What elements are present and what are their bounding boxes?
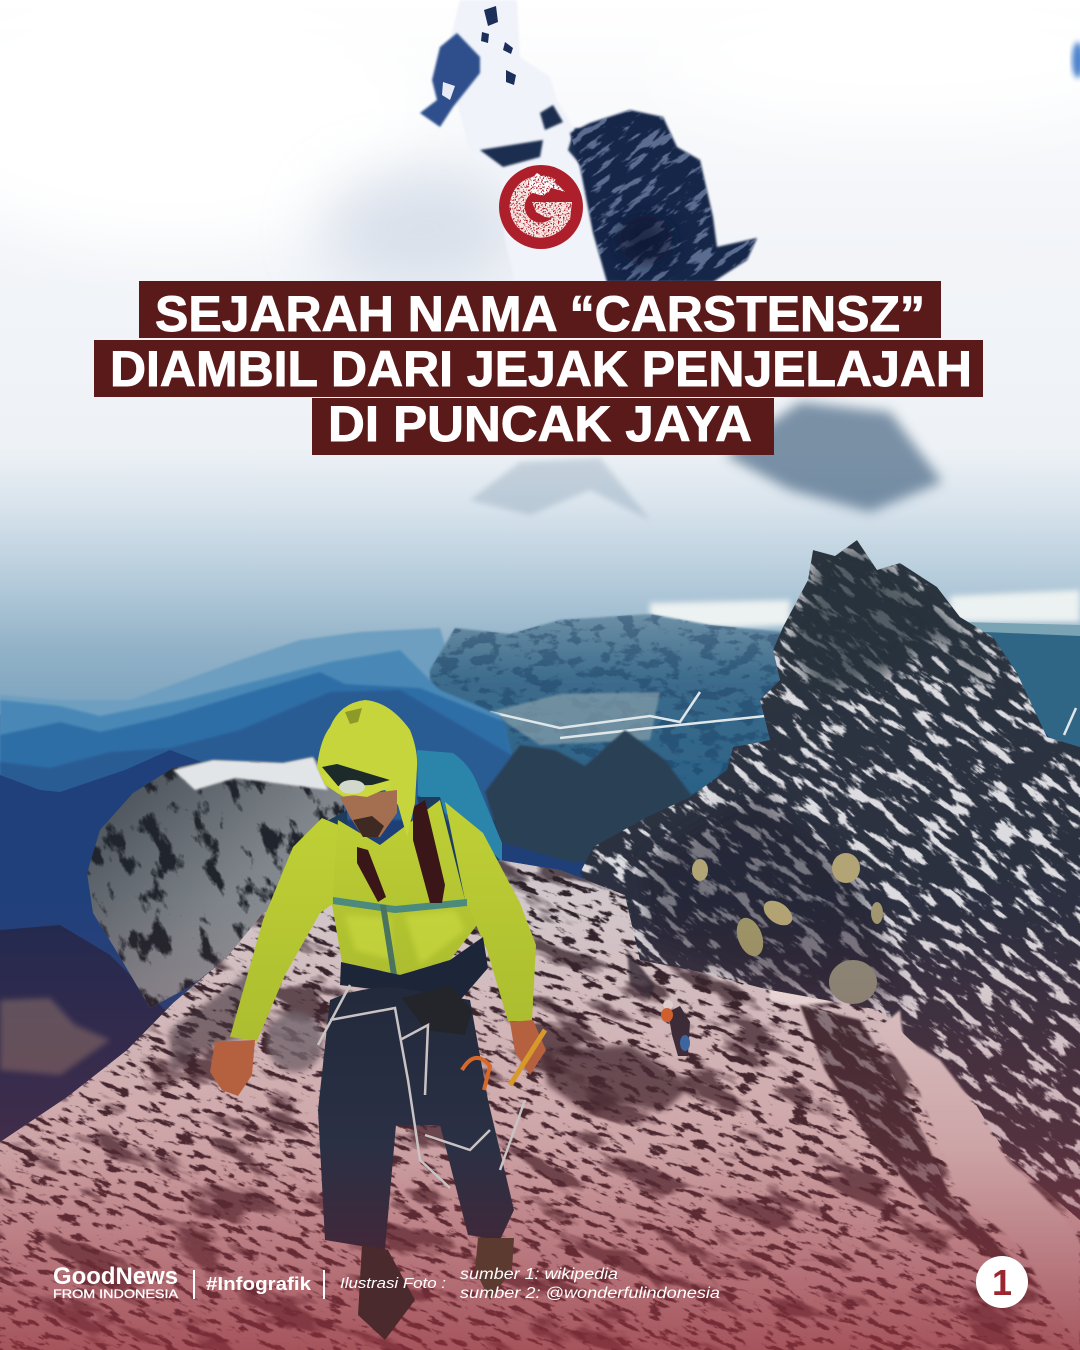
centre range bbox=[430, 614, 790, 800]
back straps bbox=[320, 797, 470, 905]
right hand bbox=[510, 1020, 546, 1075]
divider bbox=[193, 1270, 195, 1299]
hood brim bbox=[320, 772, 390, 797]
emblem eagle head bbox=[526, 173, 565, 196]
colour tint over lower area bbox=[0, 900, 1080, 1350]
emblem ring bbox=[517, 183, 563, 230]
distant summit in clouds bbox=[420, 0, 942, 520]
backpack bbox=[417, 750, 502, 862]
boulder, left bbox=[87, 757, 345, 1008]
title bar 1 bbox=[139, 281, 941, 338]
central dark peaks bbox=[485, 730, 692, 862]
horizon light bands bbox=[650, 590, 1080, 632]
hood shadow bbox=[345, 708, 362, 724]
far right range bbox=[960, 622, 1080, 640]
jacket body bbox=[332, 800, 477, 975]
left arm bbox=[230, 818, 350, 1041]
dark peak top bbox=[790, 545, 1000, 700]
brand logo text: GoodNews bbox=[53, 1263, 178, 1290]
right arm bbox=[445, 802, 536, 1021]
beard bbox=[353, 816, 384, 837]
dark gully, right bbox=[800, 1005, 1045, 1292]
page number: 1 bbox=[992, 1262, 1012, 1303]
legs bbox=[318, 988, 514, 1250]
title bar 2 bbox=[94, 340, 983, 397]
hashtag: #Infografik bbox=[206, 1274, 312, 1294]
valley roads bbox=[490, 692, 1076, 738]
foreground summit rock bbox=[0, 860, 1080, 1350]
page number bbox=[976, 1256, 1028, 1308]
left range 2 bbox=[0, 650, 520, 790]
distant mountain ranges bbox=[0, 590, 1080, 1142]
divider bbox=[323, 1270, 325, 1299]
jacket fold highlight bbox=[345, 910, 465, 965]
title line 2: DIAMBIL DARI JEJAK PENJELAJAH bbox=[110, 341, 972, 397]
navy rock face bbox=[420, 33, 480, 127]
emblem pattern bbox=[509, 175, 573, 239]
clouds bbox=[0, 0, 1080, 290]
dark right face bbox=[570, 110, 757, 282]
goggles band bbox=[322, 764, 390, 786]
hood bbox=[317, 700, 417, 837]
lower left dark slope bbox=[0, 925, 175, 1142]
dark rock patch bbox=[540, 1045, 692, 1115]
camera bbox=[402, 985, 472, 1035]
left range dark bbox=[0, 750, 320, 960]
source 2: sumber 2: @wonderfulindonesia bbox=[460, 1285, 720, 1302]
photo credit label: Ilustrasi Foto : bbox=[340, 1275, 446, 1292]
dark shadowed face bbox=[640, 790, 900, 1000]
rocky ridge and peak, right bbox=[580, 540, 1080, 1220]
left range 1 bbox=[0, 628, 470, 780]
title line 1: SEJARAH NAMA “CARSTENSZ” bbox=[155, 286, 925, 342]
ochre rock patches bbox=[692, 859, 708, 881]
pale valley bbox=[490, 692, 660, 745]
small dark rocks bbox=[480, 105, 590, 170]
sky background bbox=[0, 0, 1080, 720]
face bbox=[340, 790, 397, 837]
main climber bbox=[210, 700, 546, 1340]
boots bbox=[358, 1245, 415, 1340]
camera straps bbox=[357, 800, 445, 903]
title bbox=[94, 281, 983, 455]
left range 4 bbox=[0, 690, 520, 820]
chest strap bbox=[333, 897, 467, 913]
ridge spots bbox=[481, 6, 516, 85]
source 1: sumber 1: wikipedia bbox=[460, 1266, 618, 1283]
snow slope bbox=[767, 990, 835, 1006]
snow gully, right bbox=[877, 1010, 1080, 1350]
lower left grey rock bbox=[0, 998, 110, 1075]
ropes and carabiners bbox=[318, 985, 525, 1188]
footer bbox=[53, 1263, 720, 1302]
zipper bbox=[380, 905, 397, 975]
lower summit below title bbox=[725, 402, 942, 512]
small climber in distance bbox=[661, 1000, 690, 1056]
title bar 3 bbox=[312, 398, 774, 455]
harness and waist bbox=[340, 937, 488, 998]
left hand bbox=[210, 1040, 255, 1096]
title line 3: DI PUNCAK JAYA bbox=[328, 396, 752, 452]
headlamp bbox=[339, 780, 365, 794]
dark rocks at left of arm bbox=[166, 967, 250, 1075]
snow ridge bbox=[445, 0, 607, 282]
logo emblem bbox=[499, 165, 583, 249]
grey rock behind arm bbox=[267, 1012, 323, 1072]
emblem G bar bbox=[532, 202, 572, 220]
brand logo text: FROM INDONESIA bbox=[53, 1287, 178, 1301]
left range 3 bbox=[0, 672, 520, 800]
